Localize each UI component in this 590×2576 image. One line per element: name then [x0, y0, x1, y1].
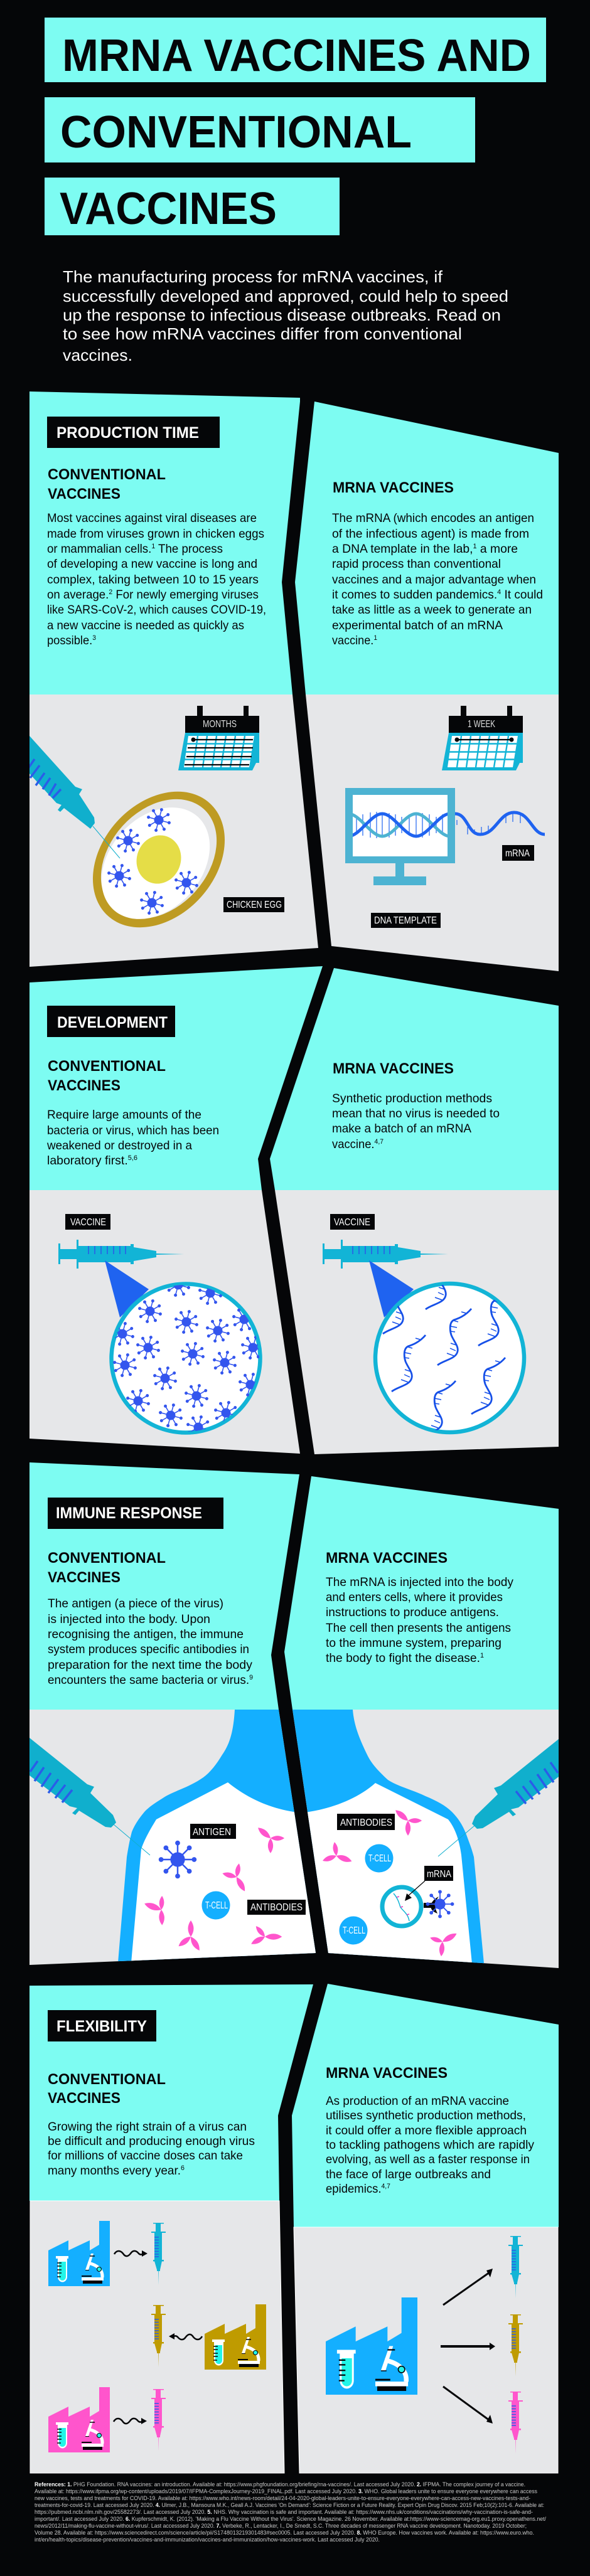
label: immune response: [48, 1498, 223, 1529]
references: treatments-for-covid-19. Last accessed July 2020. 4. Ulmer, J.B., Mansoura M.K., Geall A.J. Vaccines 'On Demand': Science Fiction or a Future Reality. Expert Opin Drug Discov. 2015 Feb;10(2):101-6. Available at:: [35, 2502, 544, 2508]
references: https://pubmed.ncbi.nlm.nih.gov/25582273/. Last accessed July 2020. 5. NHS. Why vaccination is safe and important. Available at: https://www.nhs.uk/conditions/vaccinations/why-vaccination-is-safe-and-: [35, 2509, 533, 2515]
label: DNA template: DNA TEMPLATE: [374, 915, 437, 926]
heading: mrna vaccines: MRNA VACCINES: [333, 479, 454, 496]
text: conventional immune response: encounters the same bacteria or virus.: [48, 1673, 256, 1687]
icon: t-cell right bottom: [339, 1916, 368, 1945]
panel: immune response: [30, 1462, 559, 1970]
grey panel: development right: [275, 1190, 559, 1454]
references: References: 1. PHG Foundation. RNA vaccines: an introduction. Available at: https://www.phgfoundation.org/briefing/rna-vaccines/. Last accessed July 2020. 2. IFPMA. The complex journey of a vaccine.: [35, 2481, 525, 2488]
heading: mrna vaccines: MRNA VACCINES: [333, 1060, 454, 1077]
intro text: successfully developed and approved, could help to speed: [63, 287, 508, 306]
text: mrna immune response: and enters cells, where it provides: [326, 1590, 503, 1604]
icon: syringe right: [438, 1739, 559, 1856]
intro text: up the response to infectious disease outbreaks. Read on: [63, 306, 501, 324]
text: conventional production time: a new vaccine is needed as quickly as: [47, 619, 244, 632]
heading: conventional vaccines: CONVENTIONAL: [48, 1058, 166, 1075]
text: mrna immune response: the body to fight the disease.: [326, 1651, 482, 1665]
arrow: to gold syringe: [441, 2343, 495, 2350]
title: VACCINES: [60, 184, 277, 234]
title: [45, 18, 546, 235]
text: conventional immune response: 9: [249, 1674, 253, 1681]
icon: antibodies left: [143, 1826, 284, 1952]
text: mrna flexibility: utilises synthetic production methods,: [326, 2109, 526, 2122]
cyan panel: production time left: [30, 391, 300, 695]
icon: chicken egg: [66, 765, 252, 954]
text: mrna immune response: 1: [480, 1652, 484, 1659]
text: mrna production time: a more: [477, 542, 518, 556]
arrow: to teal syringe: [443, 2269, 493, 2305]
intro text: [63, 267, 508, 365]
heading: conventional vaccines: CONVENTIONAL: [48, 1550, 166, 1567]
label: mRNA: mRNA: [505, 848, 530, 859]
intro text: vaccines.: [63, 346, 132, 365]
text: conventional development: weakened or destroyed in a: [46, 1139, 192, 1152]
icon: calendar months: MONTHS: [203, 719, 237, 730]
grey panel: development left: [30, 1190, 300, 1454]
heading: conventional vaccines: VACCINES: [48, 2090, 121, 2107]
text: mrna immune response: The mRNA is injected into the body: [326, 1575, 513, 1589]
references: important/. Last accessed July 2020. 6. Kupferschmidt, K. (2012). 'Making a Flu Vaccine Without the Virus'. Science Magazine. 26 November. Available at:https://www-sciencemag-org.eu1.proxy.openathens.net/: [35, 2516, 546, 2522]
label: mRNA: [502, 845, 534, 861]
icon: gold factory: [205, 2304, 266, 2370]
label: antigen: [190, 1824, 236, 1839]
illustration: human body: [117, 1710, 485, 1970]
heading: conventional vaccines: [48, 466, 166, 503]
text: mrna production time: rapid process than conventional: [332, 557, 501, 571]
text: conventional production time: made from viruses grown in chicken eggs: [47, 527, 264, 541]
text: conventional production time: 3: [92, 634, 96, 642]
icon: cell with mRNA and presented antigen: [382, 1887, 454, 1926]
text: mrna flexibility: the face of large outbreaks and: [326, 2168, 491, 2181]
text: mrna production time: 4: [497, 588, 501, 596]
text: mrna production time: of the infectious agent) is made from: [332, 527, 529, 541]
arrow: to pink syringe: [443, 2387, 493, 2424]
label: production time: [47, 417, 220, 448]
text: mrna production time: a DNA template in the lab,: [332, 542, 475, 556]
panel: production time: [28, 391, 559, 971]
text: conventional production time: 1: [151, 543, 155, 550]
references: new vaccines, tests and treatments for COVID-19. Available at: https://www.who.int/news-room/detail/24-04-2020-global-leaders-unite-to-ensure-everyone-everywhere-can-access-new-vaccines-tests-and-: [35, 2495, 530, 2501]
text: conventional development: Require large amounts of the: [47, 1108, 201, 1122]
label: production time: PRODUCTION TIME: [56, 424, 199, 442]
text: conventional production time: For newly emerging viruses: [112, 588, 259, 602]
heading: conventional vaccines: CONVENTIONAL: [48, 2071, 166, 2088]
references: Volume 28. Available at: https://www.sciencedirect.com/science/article/pii/S1748013219301483#sec0005. Last accessed July 2020. 8. WHO Europe. How vaccines work. Available at: https://www.euro.who.: [35, 2530, 534, 2536]
title: CONVENTIONAL: [60, 107, 412, 157]
label: flexibility: FLEXIBILITY: [56, 2018, 147, 2035]
text: mrna production time: it comes to sudden pandemics.: [332, 588, 501, 602]
label: antibodies right: [337, 1814, 395, 1830]
cyan panel: flexibility left: [30, 1984, 313, 2201]
text: mrna production time: It could: [501, 588, 543, 602]
icon: large blue factory: [326, 2297, 417, 2395]
text: mrna immune response: to the immune system, preparing: [326, 1636, 501, 1650]
icon: syringe right: [323, 1240, 448, 1269]
text: conventional flexibility: Growing the right strain of a virus can: [48, 2120, 247, 2134]
text: conventional production time: of developing a new vaccine is long and: [47, 557, 257, 571]
text: mrna development: vaccine.: [332, 1137, 377, 1151]
grey panel: immune response right: [292, 1710, 559, 1968]
text: conventional immune response: [48, 1597, 253, 1687]
icon: teal syringe: [151, 2223, 166, 2285]
heading: conventional vaccines: VACCINES: [48, 1077, 121, 1094]
cyan panel: development left: [30, 966, 323, 1190]
text: conventional development: laboratory first.: [47, 1154, 128, 1168]
label: vaccine right: [330, 1214, 375, 1230]
text: conventional production time: Most vaccines against viral diseases are: [47, 511, 257, 525]
text: conventional production time: The process: [155, 542, 223, 556]
label: DNA template: [371, 913, 441, 928]
icon: magnified view of mRNA strands: [369, 1253, 524, 1437]
text: conventional production time: on average.: [47, 588, 112, 602]
label: chicken egg: [223, 897, 284, 912]
text: conventional immune response: recognising the antigen, the immune: [48, 1627, 244, 1641]
icon: syringe left: [30, 1738, 150, 1855]
icon: t-cell right bottom: T-CELL: [343, 1925, 365, 1936]
icon: calendar one week: [442, 706, 523, 770]
text: mrna flexibility: evolving, as well as a faster response in: [326, 2153, 530, 2166]
icon: monitor with DNA template: [345, 788, 455, 885]
intro text: to see how mRNA vaccines differ from conventional: [63, 324, 462, 343]
icon: pink factory: [48, 2387, 110, 2452]
text: conventional production time: 2: [109, 588, 112, 596]
label: development: DEVELOPMENT: [57, 1014, 168, 1031]
text: mrna development: 4,7: [375, 1138, 384, 1146]
text: conventional immune response: is injected into the body. Upon: [48, 1612, 210, 1626]
arrow: mRNA pointer: [405, 1881, 425, 1901]
text: mrna immune response: instructions to produce antigens.: [326, 1605, 499, 1619]
text: conventional immune response: preparation for the next time the body: [48, 1658, 252, 1672]
cyan panel: flexibility right: [292, 1984, 559, 2227]
arrow: wavy to teal syringe: [114, 2250, 148, 2257]
icon: syringe left: [58, 1240, 184, 1269]
references: [35, 2481, 546, 2543]
heading: conventional vaccines: [48, 2071, 166, 2107]
grey panel: flexibility left: [30, 2201, 284, 2473]
label: development: [47, 1006, 175, 1037]
text: conventional development: bacteria or virus, which has been: [47, 1124, 219, 1137]
icon: t-cell right top: [365, 1844, 393, 1872]
icon: teal syringe right: [508, 2236, 523, 2298]
icon: syringe into egg: [28, 736, 120, 858]
icon: pink syringe: [151, 2389, 166, 2451]
label: flexibility: [48, 2010, 156, 2041]
text: mrna development: mean that no virus is needed to: [332, 1107, 500, 1120]
text: mrna flexibility: As production of an mRNA vaccine: [326, 2094, 509, 2108]
text: mrna development: Synthetic production methods: [332, 1092, 492, 1105]
label: antigen: ANTIGEN: [193, 1827, 231, 1838]
label: antibodies left: ANTIBODIES: [250, 1902, 303, 1913]
references: news/2012/11/making-flu-vaccine-without-virus/. Last accesssed July 2020. 7. Verbeke, R., Lentacker, I., De Smedt, S.C. Three decades of messenger RNA vaccine development. Nanotoday. 2019 October;: [35, 2523, 527, 2529]
text: mrna production time: [332, 511, 543, 647]
heading: conventional vaccines: [48, 1550, 166, 1586]
icon: t-cell left: T-CELL: [205, 1900, 228, 1911]
references: Available at: https://www.ifpma.org/wp-content/uploads/2019/07/IFPMA-ComplexJourney-2019_FINAL.pdf. Last accessed July 2020. 3. WHO. Global leaders unite to ensure everyone everywhere can access: [35, 2488, 537, 2494]
icon: mRNA strand: [455, 812, 545, 834]
cyan panel: immune response right: [284, 1476, 559, 1710]
text: mrna development: [332, 1092, 500, 1151]
icon: blue factory: [48, 2221, 110, 2286]
cyan panel: immune response left: [30, 1462, 299, 1710]
icon: calendar one week: 1 WEEK: [468, 719, 495, 730]
heading: conventional vaccines: VACCINES: [48, 486, 121, 503]
text: mrna flexibility: it could offer a more flexible approach: [326, 2124, 527, 2137]
icon: calendar months: [178, 706, 259, 770]
heading: mrna vaccines: MRNA VACCINES: [326, 2065, 448, 2082]
arrow: wavy to pink syringe: [114, 2418, 147, 2424]
arrow: wavy to gold syringe: [169, 2333, 202, 2339]
text: mrna production time: take as little as a week to generate an: [332, 603, 532, 617]
label: antibodies left: [247, 1900, 306, 1915]
text: conventional flexibility: for millions of vaccine doses can take: [48, 2149, 243, 2163]
text: mrna immune response: The cell then presents the antigens: [326, 1621, 511, 1635]
label: mRNA: mRNA: [427, 1869, 451, 1880]
text: conventional flexibility: 6: [181, 2164, 185, 2172]
grey panel: production time left: [30, 695, 318, 967]
cyan panel: production time right: [295, 402, 559, 695]
grey panel: production time right: [306, 695, 559, 971]
panel: development: [30, 966, 559, 1454]
text: mrna production time: The mRNA (which encodes an antigen: [332, 511, 534, 525]
title: MRNA VACCINES AND: [62, 31, 531, 81]
icon: gold syringe: [151, 2305, 166, 2367]
icon: pink syringe right: [508, 2392, 523, 2454]
cyan panel: development right: [270, 968, 559, 1190]
heading: conventional vaccines: [48, 1058, 166, 1094]
icon: magnified view of viruses: [105, 1260, 268, 1442]
text: mrna development: make a batch of an mRNA: [332, 1122, 471, 1136]
label: immune response: IMMUNE RESPONSE: [56, 1504, 202, 1522]
panel: flexibility: [30, 1984, 559, 2473]
label: antibodies right: ANTIBODIES: [340, 1818, 392, 1828]
text: mrna immune response: [326, 1575, 513, 1665]
text: mrna flexibility: [326, 2094, 534, 2196]
text: mrna production time: 1: [473, 543, 477, 550]
icon: antibodies right: [322, 1808, 458, 1957]
icon: t-cell left: [202, 1891, 230, 1920]
text: mrna flexibility: to tackling pathogens which are rapidly: [326, 2138, 534, 2152]
text: mrna production time: 1: [373, 634, 377, 642]
heading: conventional vaccines: CONVENTIONAL: [48, 466, 166, 483]
text: mrna flexibility: epidemics.: [326, 2182, 384, 2196]
text: mrna production time: vaccine.: [332, 634, 377, 647]
text: conventional immune response: system produces specific antibodies in: [48, 1642, 249, 1656]
text: mrna production time: vaccines and a major advantage when: [332, 573, 536, 587]
text: conventional production time: possible.: [47, 634, 95, 647]
label: vaccine left: VACCINE: [70, 1217, 106, 1228]
text: conventional production time: [47, 511, 266, 647]
text: conventional immune response: The antigen (a piece of the virus): [48, 1597, 223, 1610]
label: vaccine right: VACCINE: [334, 1217, 370, 1228]
label: vaccine left: [65, 1214, 110, 1230]
text: mrna flexibility: 4,7: [381, 2183, 390, 2190]
text: conventional development: 5,6: [128, 1154, 137, 1162]
icon: antigen virus: [159, 1841, 196, 1878]
text: conventional flexibility: be difficult and producing enough virus: [48, 2134, 255, 2148]
intro text: The manufacturing process for mRNA vaccines, if: [63, 267, 443, 286]
text: conventional development: [46, 1108, 219, 1168]
label: mRNA: [424, 1866, 453, 1881]
references: int/en/health-topics/disease-prevention/vaccines-and-immunization/vaccines-and-immunization/how-vaccines-work. Last accessed July 2020.: [35, 2536, 380, 2543]
text: conventional flexibility: many months every year.: [48, 2164, 185, 2178]
grey panel: flexibility right: [294, 2227, 558, 2473]
text: conventional production time: like SARS-CoV-2, which causes COVID-19,: [47, 603, 266, 617]
text: mrna production time: experimental batch of an mRNA: [332, 619, 503, 632]
heading: conventional vaccines: VACCINES: [48, 1569, 121, 1586]
icon: gold syringe right: [508, 2314, 523, 2376]
grey panel: immune response left: [30, 1710, 316, 1965]
label: chicken egg: CHICKEN EGG: [227, 900, 282, 910]
icon: t-cell right top: T-CELL: [368, 1853, 391, 1864]
text: conventional production time: or mammalian cells.: [47, 542, 156, 556]
text: conventional production time: complex, taking between 10 to 15 years: [47, 573, 259, 587]
text: conventional flexibility: [48, 2120, 255, 2178]
heading: mrna vaccines: MRNA VACCINES: [326, 1550, 448, 1567]
